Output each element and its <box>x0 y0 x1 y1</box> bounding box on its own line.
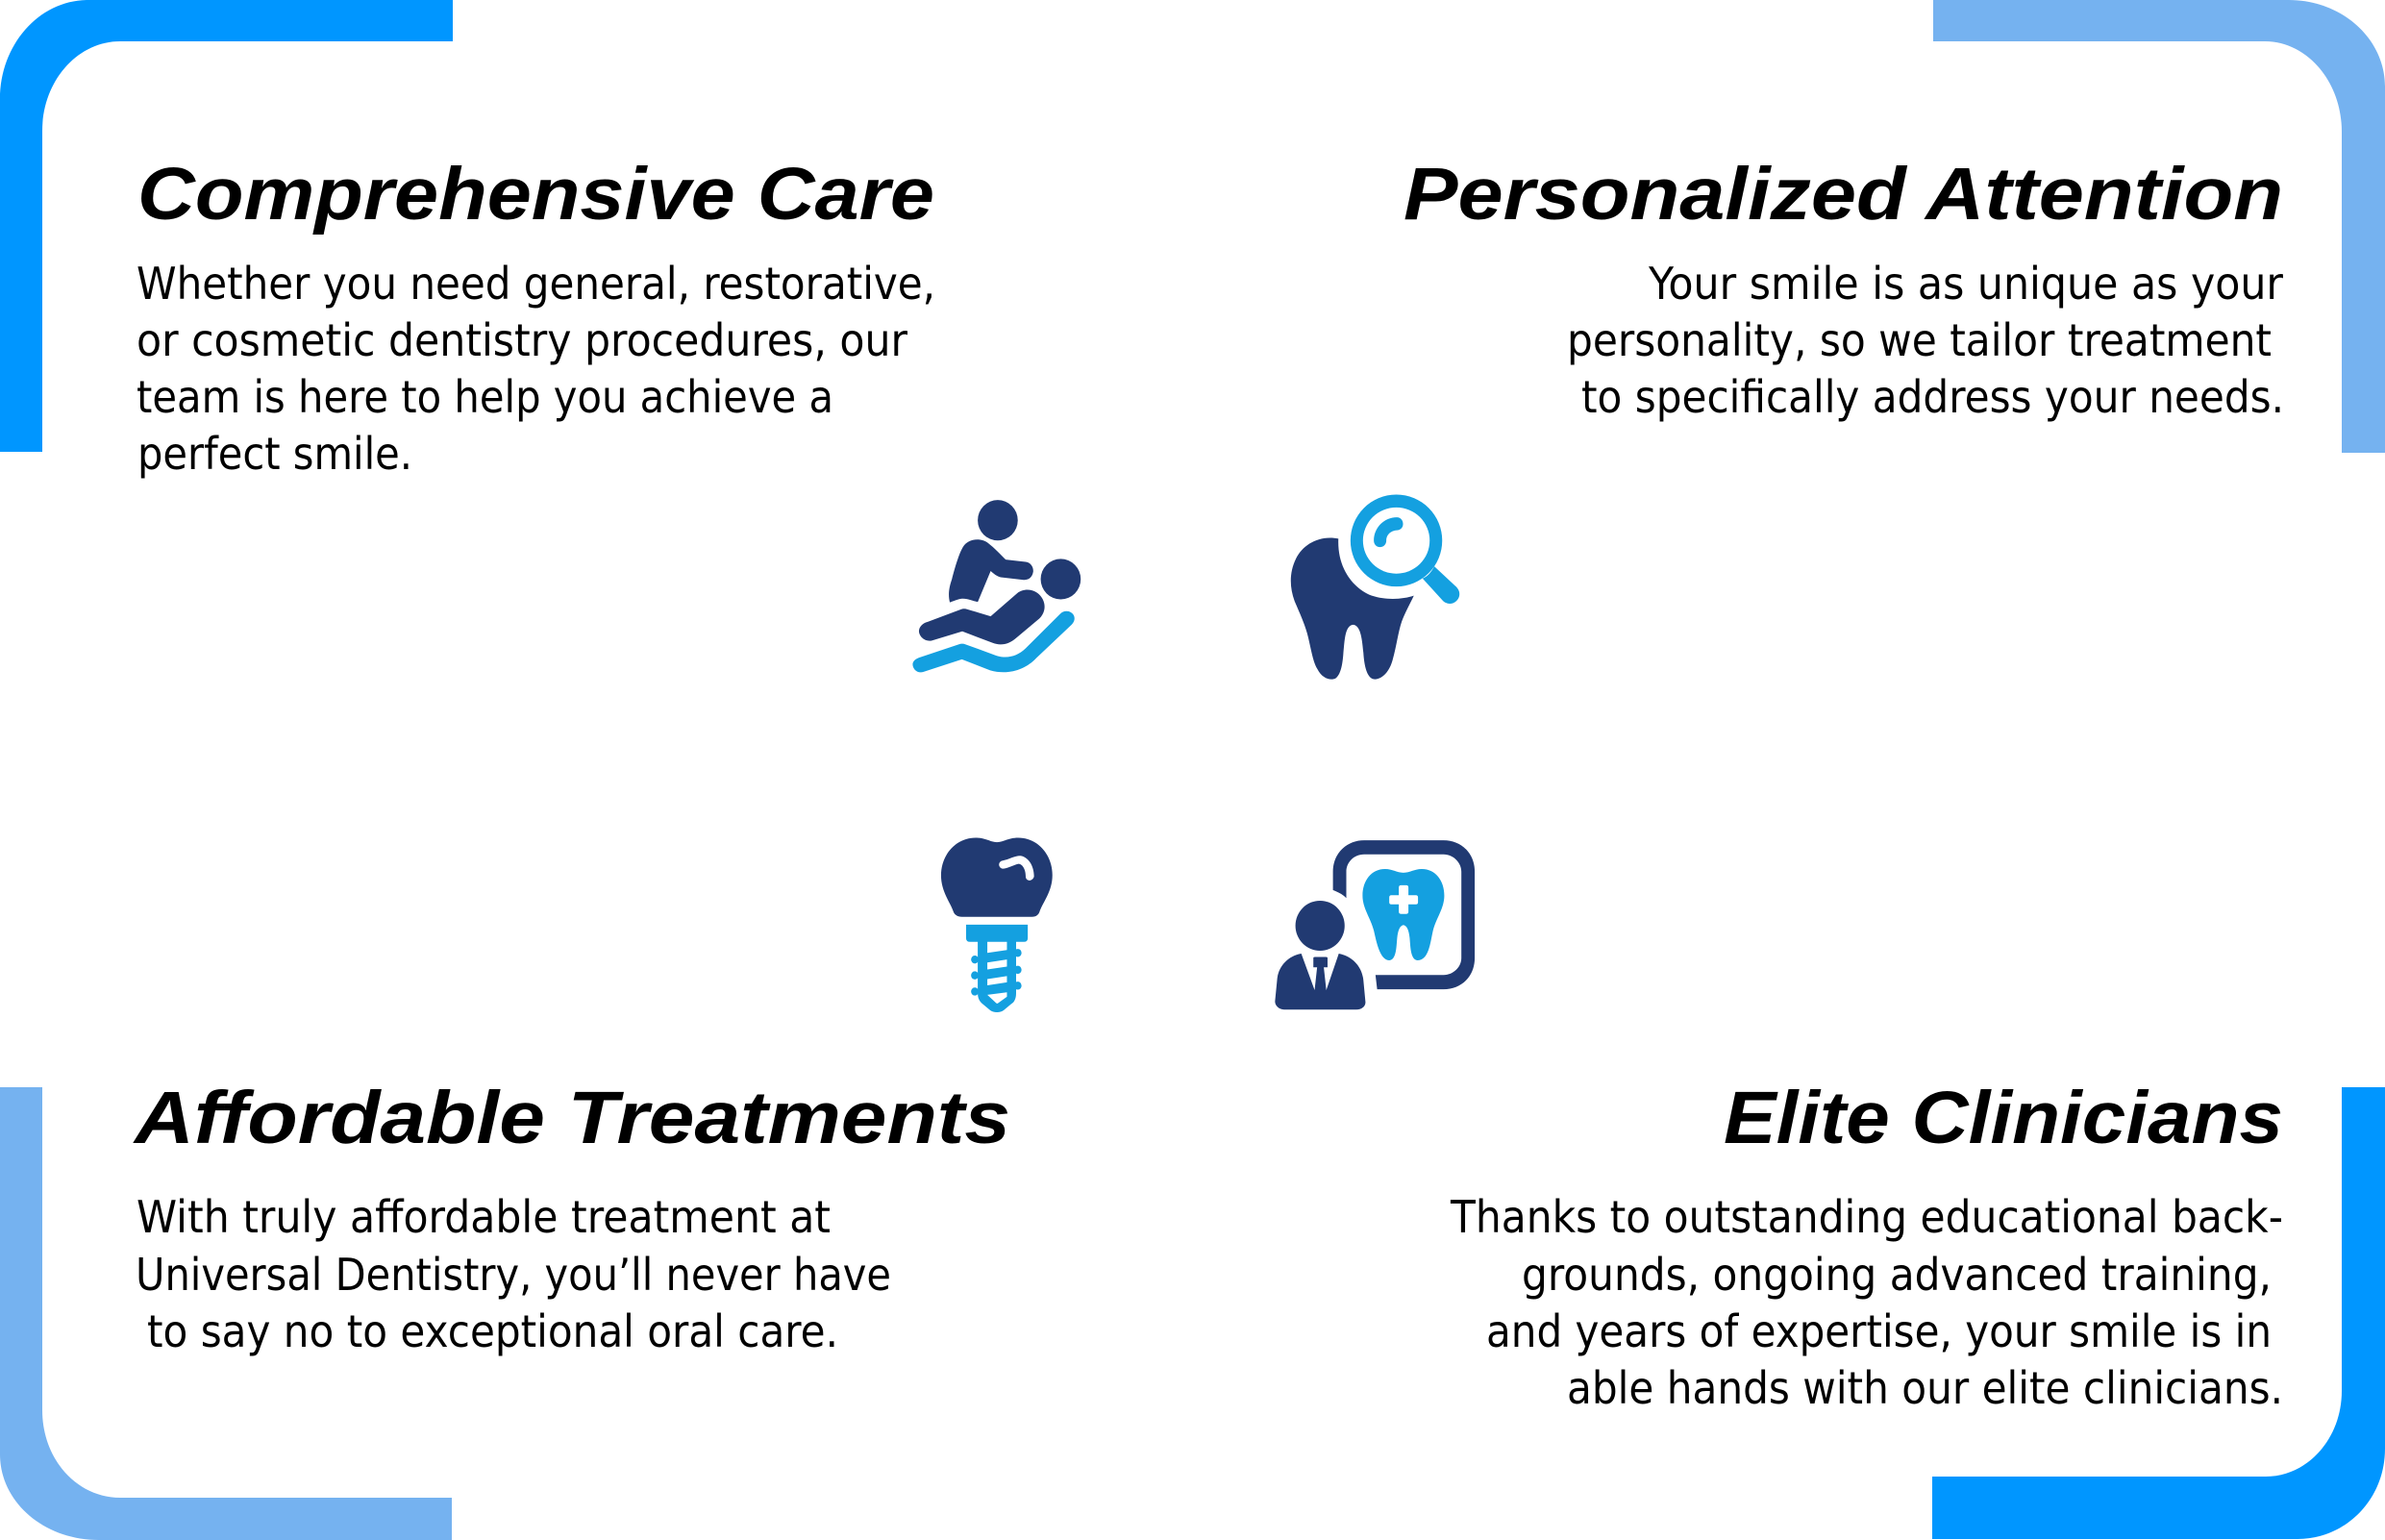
body text: comprehensive care: or cosmetic dentistry procedures, our <box>137 314 907 366</box>
body text: comprehensive care: perfect smile. <box>137 428 412 480</box>
body text: elite clinicians: able hands with our elite clinicians. <box>1567 1362 2283 1414</box>
corner bracket: bottom right <box>1932 1087 2385 1539</box>
body text: personalized attention: to specifically address your needs. <box>1581 371 2284 423</box>
body text: comprehensive care <box>137 258 935 480</box>
body text: affordable treatments: With truly affordable treatment at <box>137 1191 831 1243</box>
body text: comprehensive care: Whether you need general, restorative, <box>137 258 935 310</box>
icon: clinician with tooth chart <box>1275 840 1475 1009</box>
body text: affordable treatments <box>136 1191 891 1357</box>
panel: elite clinicians <box>1450 1077 2283 1414</box>
heading: personalized attention: Personalized Attention <box>1404 153 2283 236</box>
icon: dental implant <box>941 838 1053 1012</box>
body text: personalized attention: personality, so we tailor treatment <box>1567 314 2272 366</box>
panel: personalized attention <box>1404 153 2284 423</box>
body text: elite clinicians <box>1450 1191 2283 1414</box>
heading: affordable treatments: Affordable Treatments <box>133 1077 1010 1159</box>
body text: affordable treatments: Universal Dentistry, you’ll never have <box>136 1249 891 1301</box>
body text: elite clinicians: and years of expertise, your smile is in <box>1486 1305 2272 1357</box>
body text: elite clinicians: Thanks to outstanding educational back- <box>1450 1191 2283 1243</box>
body text: personalized attention: Your smile is as unique as your <box>1648 258 2283 310</box>
corner bracket: top right <box>1933 0 2385 453</box>
body text: elite clinicians: grounds, ongoing advanced training, <box>1522 1249 2272 1301</box>
body text: affordable treatments: to say no to exceptional oral care. <box>147 1305 838 1357</box>
corner bracket: bottom left <box>0 1087 452 1540</box>
icon: dentist treating patient in chair <box>912 500 1081 672</box>
icon: tooth with magnifying glass <box>1291 494 1459 680</box>
corner bracket: top left <box>0 0 453 452</box>
heading: comprehensive care: Comprehensive Care <box>137 153 934 236</box>
panel: affordable treatments <box>133 1077 1010 1357</box>
body text: personalized attention <box>1567 258 2284 423</box>
body text: comprehensive care: team is here to help you achieve a <box>137 371 833 423</box>
panel: comprehensive care <box>137 153 935 480</box>
heading: elite clinicians: Elite Clinicians <box>1724 1077 2283 1159</box>
